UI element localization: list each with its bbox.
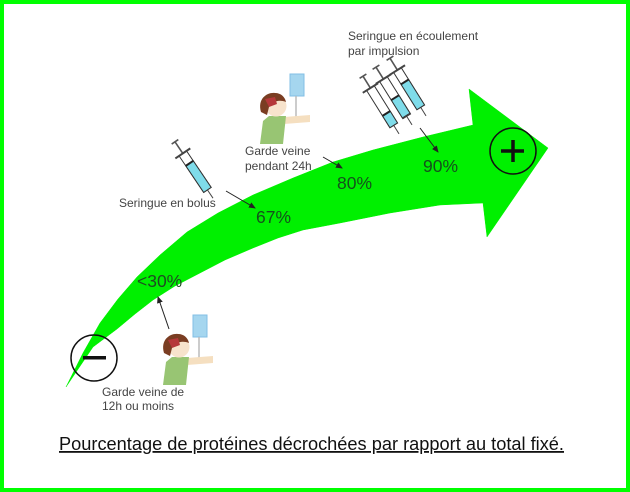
caption: Pourcentage de protéines décrochées par rapport au total fixé. [59, 434, 564, 454]
icon: patient 12h [163, 315, 213, 385]
label: 24h: pendant 24h [245, 159, 312, 173]
icon: patient 24h [260, 74, 310, 144]
arrow: pulse to 90% [420, 128, 438, 152]
arrow: bolus to 67% [226, 191, 255, 208]
arrow: 12h to under 30% [158, 297, 169, 329]
label: 24h: Garde veine [245, 144, 311, 158]
percentage: under 30%: <30% [137, 271, 182, 291]
curved green arrow [66, 89, 548, 387]
icon: pulse syringes [355, 53, 434, 139]
percentage: 90%: 90% [423, 156, 458, 176]
label: pulse syringe: par impulsion [348, 44, 419, 58]
percentage: 80%: 80% [337, 173, 372, 193]
label: 12h: 12h ou moins [102, 399, 174, 413]
label: 12h: Garde veine de [102, 385, 184, 399]
percentage: 67%: 67% [256, 207, 291, 227]
icon: bolus syringe [168, 137, 220, 203]
label: pulse syringe: Seringue en écoulement [348, 29, 479, 43]
label: bolus syringe: Seringue en bolus [119, 196, 216, 210]
minus symbol [71, 335, 117, 381]
plus symbol [490, 128, 536, 174]
arrow: 24h to 80% [323, 157, 342, 168]
